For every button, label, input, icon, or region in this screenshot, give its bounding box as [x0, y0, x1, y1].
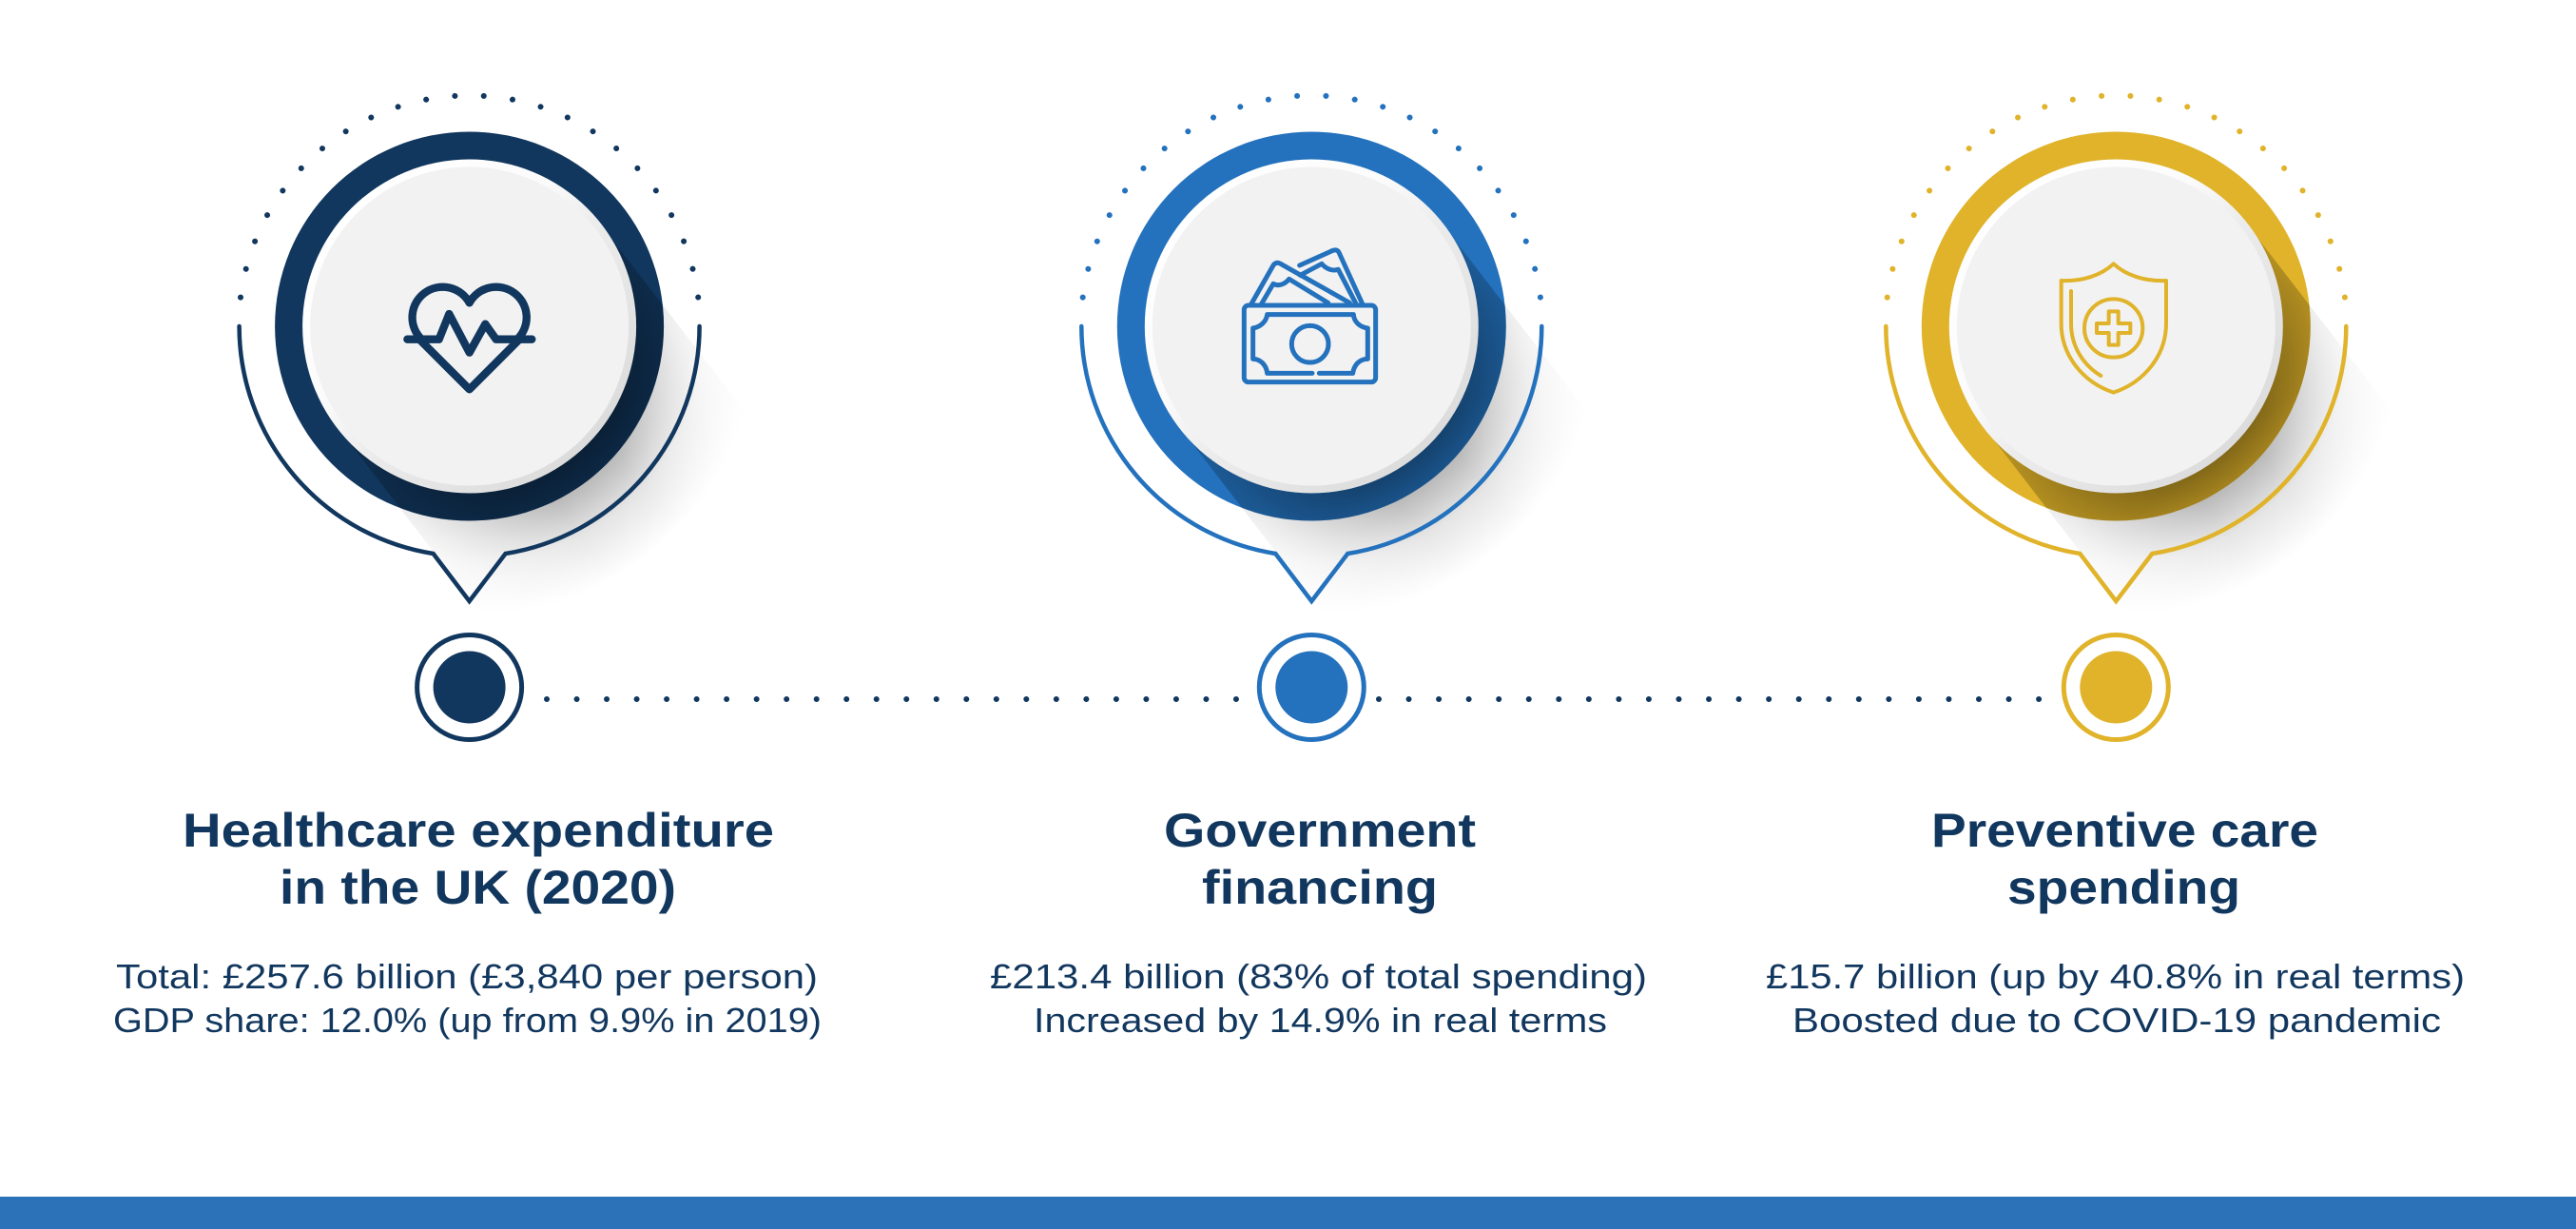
heading: healthcare expenditure: in the UK (2020) [280, 861, 676, 914]
text block: government financing details: Increased by 14.9% in real terms [1034, 1001, 1607, 1040]
callout outline [240, 326, 700, 601]
text block: preventive care details: £15.7 billion (up by 40.8% in real terms) [1766, 957, 2465, 996]
heading: healthcare expenditure [183, 804, 774, 914]
text block: preventive care details [1766, 957, 2465, 1040]
ring shadow [1995, 238, 2311, 521]
text block: healthcare expenditure details [113, 957, 822, 1040]
text block: healthcare expenditure details: GDP share: 12.0% (up from 9.9% in 2019) [113, 1001, 822, 1040]
disc rim [302, 160, 636, 493]
bottom bar [0, 1197, 2576, 1229]
heading: preventive care spending: spending [2007, 861, 2240, 914]
text block: healthcare expenditure details: Total: £257.6 billion (£3,840 per person) [116, 957, 818, 996]
text block: government financing details: £213.4 billion (83% of total spending) [990, 957, 1647, 996]
marker: government financing [1259, 635, 1364, 740]
disc face [310, 167, 629, 485]
disc face [1957, 167, 2276, 485]
heading: preventive care spending [1931, 804, 2318, 914]
heading: healthcare expenditure: Healthcare expenditure [183, 804, 774, 857]
icon: banknotes [1244, 250, 1376, 382]
callout outline [1081, 326, 1541, 601]
panel: healthcare expenditure badge [237, 93, 705, 605]
cast shadow [399, 305, 705, 580]
disc face [1152, 167, 1471, 485]
marker: preventive care [2063, 635, 2168, 740]
dotted arc [241, 95, 698, 298]
disc rim [1949, 160, 2283, 493]
heading: government financing: financing [1202, 861, 1438, 914]
dotted connector: first to second marker [547, 696, 1237, 702]
outer ring [275, 131, 664, 521]
marker: healthcare expenditure [417, 635, 522, 740]
ring shadow [350, 240, 664, 521]
cast shadow [1242, 305, 1546, 580]
icon: heart with pulse [407, 287, 532, 389]
outer ring [1922, 131, 2311, 521]
dotted arc [1888, 95, 2345, 298]
ring shadow [1191, 238, 1506, 521]
heading: government financing: Government [1164, 804, 1476, 857]
dotted connector: second to third marker [1379, 696, 2041, 702]
outer ring [1117, 131, 1506, 521]
dotted arc [1083, 95, 1540, 298]
panel: government financing badge [1079, 93, 1546, 605]
text block: preventive care details: Boosted due to COVID-19 pandemic [1792, 1001, 2441, 1040]
icon: medical shield [2062, 263, 2166, 393]
heading: preventive care spending: Preventive care [1931, 804, 2318, 857]
callout outline [1886, 326, 2346, 601]
heading: government financing [1164, 804, 1476, 914]
panel: preventive care badge [1884, 93, 2351, 605]
disc rim [1145, 160, 1479, 493]
cast shadow [2046, 305, 2351, 580]
text block: government financing details [990, 957, 1647, 1040]
